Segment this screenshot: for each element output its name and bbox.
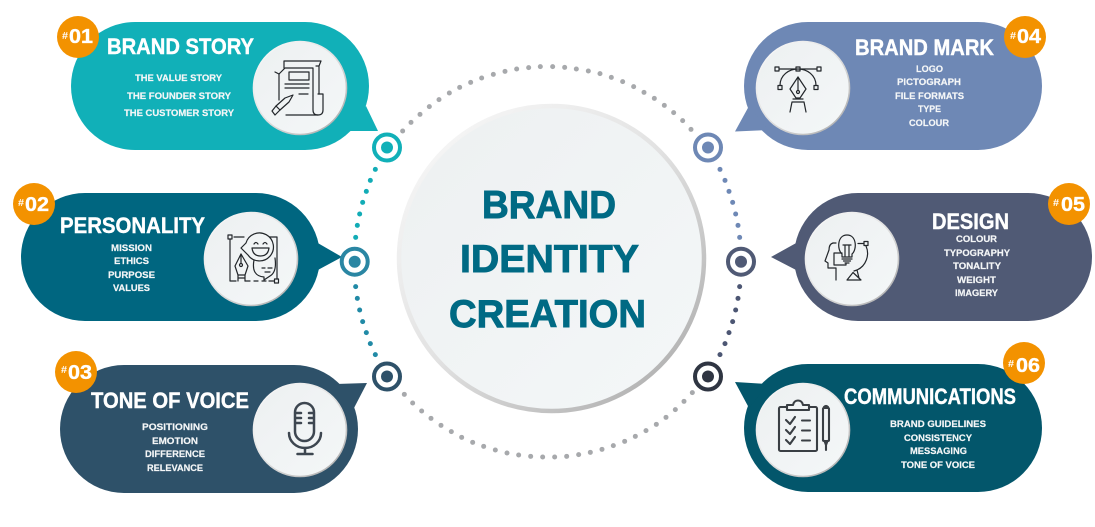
panel: brand mark (735, 16, 1046, 150)
badge number: 06 (1016, 355, 1040, 377)
list: EMOTION (152, 436, 198, 447)
title: BRAND (482, 184, 616, 227)
icon disc (254, 42, 346, 134)
icon: pen tool (775, 67, 821, 112)
list: WEIGHT (957, 275, 996, 286)
badge (13, 183, 55, 225)
icon disc (756, 42, 850, 134)
icon disc (204, 212, 298, 306)
speech bubble (735, 364, 1042, 492)
dots: lower left arc (353, 284, 378, 357)
badge (1003, 342, 1045, 384)
heading: COMMUNICATIONS (844, 384, 1016, 409)
badge number (1053, 194, 1085, 216)
icon: head with light bulb (825, 235, 868, 280)
list: POSITIONING (142, 422, 208, 433)
heading: TONE OF VOICE (91, 388, 249, 413)
list (944, 234, 1011, 299)
panel: design (771, 183, 1092, 321)
heading: PERSONALITY (60, 213, 205, 238)
panel: communications (735, 342, 1045, 492)
badge number: # (62, 31, 68, 42)
dots: top arc (400, 64, 693, 133)
list: MESSAGING (910, 446, 967, 457)
list: THE VALUE STORY (135, 73, 223, 84)
badge number: 05 (1061, 194, 1085, 216)
list: TYPE (918, 104, 942, 115)
dots: upper right arc (717, 167, 742, 240)
badge (57, 16, 99, 58)
list: VALUES (113, 283, 151, 294)
icon: pen and smiling speech bubbles (228, 233, 278, 283)
list: COLOUR (956, 234, 997, 245)
node: brand story (374, 134, 400, 160)
node: tone of voice (374, 364, 400, 390)
list (142, 422, 208, 474)
speech bubble (771, 193, 1092, 321)
badge (1048, 183, 1090, 225)
list: DIFFERENCE (145, 449, 206, 460)
title: CREATION (449, 293, 646, 336)
badge number: 01 (69, 26, 93, 48)
list: THE FOUNDER STORY (127, 91, 232, 102)
node: personality (342, 249, 368, 275)
central circle with title (399, 106, 704, 411)
node: communications (695, 364, 721, 390)
badge number (1010, 26, 1042, 48)
list: PURPOSE (108, 270, 156, 281)
list: ETHICS (114, 256, 150, 267)
list: MISSION (111, 243, 152, 254)
list (108, 243, 156, 294)
list: IMAGERY (955, 288, 999, 299)
speech bubble (21, 193, 342, 321)
node: brand mark (695, 134, 721, 160)
icon disc (254, 384, 346, 476)
dots: bottom arc (402, 390, 695, 459)
badge (55, 351, 97, 393)
badge number: 04 (1017, 26, 1042, 48)
badge number: # (61, 365, 67, 376)
icon: microphone (289, 403, 321, 454)
speech bubble (60, 365, 367, 493)
list: COLOUR (909, 118, 949, 129)
list: FILE FORMATS (895, 91, 965, 102)
panel: tone of voice (55, 351, 367, 493)
list: TONE OF VOICE (901, 460, 976, 471)
list: BRAND GUIDELINES (890, 419, 987, 430)
dotted ring (353, 64, 742, 459)
badge number: 02 (25, 194, 49, 216)
icon disc (756, 384, 850, 476)
panel: brand story (57, 16, 378, 150)
badge number: # (1053, 198, 1059, 209)
badge number: # (1008, 359, 1014, 370)
list: THE CUSTOMER STORY (124, 108, 235, 119)
list (890, 419, 987, 471)
node: design (728, 249, 754, 275)
list: CONSISTENCY (904, 433, 973, 444)
speech bubble (735, 22, 1042, 150)
list: LOGO (916, 64, 944, 75)
title: IDENTITY (460, 238, 639, 281)
list: TYPOGRAPHY (944, 248, 1011, 259)
panel: personality (13, 183, 342, 321)
heading: BRAND MARK (855, 35, 994, 60)
badge number: # (18, 198, 24, 209)
list: RELEVANCE (147, 463, 204, 474)
badge number (1008, 355, 1040, 377)
icon: clipboard checklist and pen (779, 400, 829, 451)
list: PICTOGRAPH (897, 77, 961, 88)
list (895, 64, 965, 129)
badge number: # (1010, 31, 1016, 42)
badge number: 03 (68, 362, 92, 384)
list (124, 73, 235, 119)
dots: upper left arc (353, 167, 378, 240)
icon disc (806, 212, 898, 306)
badge (1004, 16, 1046, 58)
list: TONALITY (953, 261, 1002, 272)
title (449, 184, 646, 336)
heading: BRAND STORY (107, 34, 254, 59)
icon: scroll and pencil (272, 61, 323, 115)
heading: DESIGN (932, 209, 1009, 234)
dots: lower right arc (717, 284, 742, 357)
central disc (399, 106, 704, 411)
speech bubble (71, 22, 378, 150)
